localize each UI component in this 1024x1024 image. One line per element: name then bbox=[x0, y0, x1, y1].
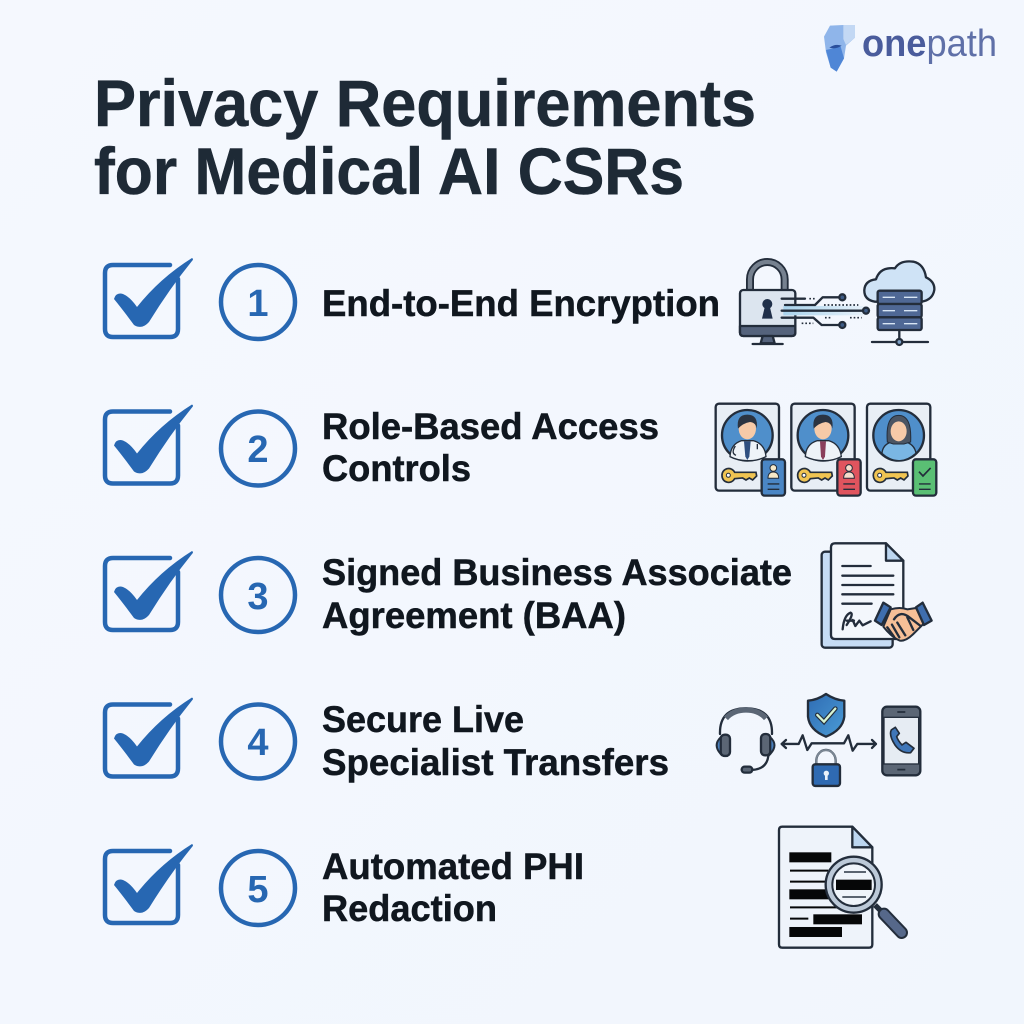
checkbox 5 bbox=[105, 844, 193, 923]
label 5 bbox=[322, 846, 584, 929]
label 2 bbox=[322, 406, 659, 489]
smartphone bbox=[882, 707, 920, 775]
number 1: 1 bbox=[247, 283, 269, 325]
icon: lock monitor to cloud server bbox=[740, 261, 934, 345]
card: physician bbox=[791, 404, 861, 496]
label 2: Role-Based Access bbox=[322, 406, 659, 447]
label 3 bbox=[322, 552, 792, 636]
title: for Medical AI CSRs bbox=[94, 134, 684, 208]
padlock bbox=[813, 750, 840, 786]
number 2: 2 bbox=[247, 429, 269, 471]
number 5: 5 bbox=[247, 869, 269, 911]
checkbox 2 bbox=[105, 404, 193, 484]
label 4: Specialist Transfers bbox=[322, 742, 669, 783]
label 5: Automated PHI bbox=[322, 846, 584, 887]
label 3: Agreement (BAA) bbox=[322, 595, 626, 636]
card: doctor bbox=[716, 404, 785, 496]
item 1: end-to-end encryption bbox=[105, 258, 934, 345]
number 5 bbox=[221, 851, 295, 925]
logo: onepath bbox=[824, 23, 997, 72]
label 3: Signed Business Associate bbox=[322, 552, 792, 593]
title bbox=[94, 66, 756, 208]
icon: secure headset to phone transfer bbox=[717, 694, 920, 786]
icon: role cards with keys and badges bbox=[716, 404, 936, 496]
number 4: 4 bbox=[247, 722, 269, 764]
logo: onepath: onepath bbox=[862, 23, 997, 65]
shield with check bbox=[808, 694, 844, 737]
checkbox 4 bbox=[105, 698, 193, 776]
headset bbox=[717, 708, 774, 773]
number 4 bbox=[221, 704, 295, 778]
checkbox 1 bbox=[105, 258, 193, 337]
number 2 bbox=[221, 412, 295, 486]
label 4 bbox=[322, 699, 669, 783]
label 2: Controls bbox=[322, 448, 471, 489]
checkbox 3 bbox=[105, 551, 193, 630]
item 5: automated phi redaction bbox=[105, 827, 902, 948]
item 2: role-based access controls bbox=[105, 404, 936, 496]
number 3 bbox=[221, 558, 295, 632]
label 4: Secure Live bbox=[322, 699, 524, 740]
label 1: End-to-End Encryption bbox=[322, 283, 720, 324]
number 3: 3 bbox=[247, 576, 269, 618]
icon: redacted document under magnifier bbox=[779, 827, 902, 948]
number 1 bbox=[221, 265, 295, 339]
item 3: signed business associate agreement bbox=[105, 543, 932, 648]
card: nurse bbox=[867, 404, 936, 496]
label 5: Redaction bbox=[322, 888, 497, 929]
title: Privacy Requirements bbox=[94, 66, 756, 140]
icon: signed contract and handshake bbox=[822, 543, 932, 648]
pulse arrows bbox=[782, 735, 876, 751]
item 4: secure live specialist transfers bbox=[105, 694, 920, 786]
